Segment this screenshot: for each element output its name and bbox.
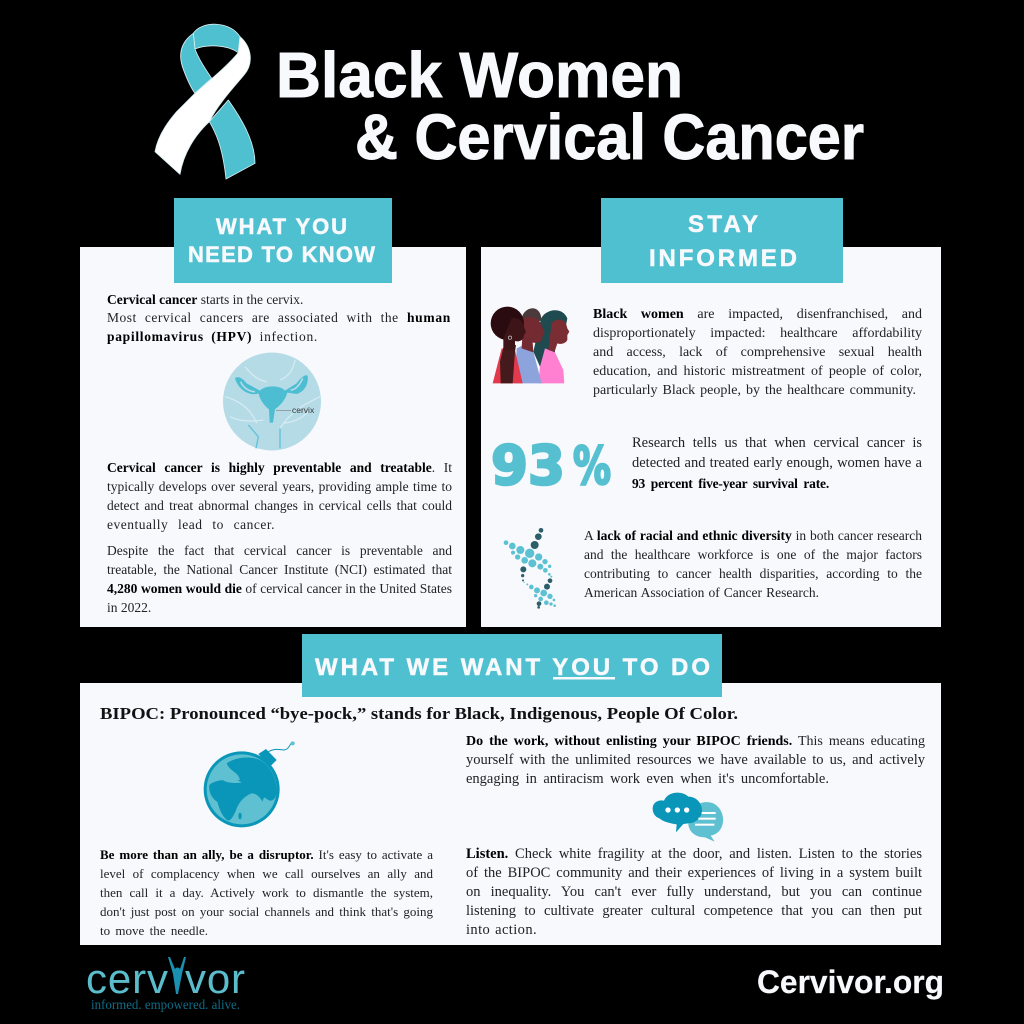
text block: survival rate: Research tells us that when cervical cancer is: [632, 435, 922, 451]
icon: three Black women in profile: [491, 307, 569, 383]
text block: be a disruptor: to move the needle.: [100, 923, 208, 938]
text block: do the work: yourself with the unlimited resources we have available to us, and actively: [466, 752, 925, 768]
text block: listen: [466, 845, 923, 940]
title: Black Women: [276, 39, 683, 111]
text block: Black women impacted: disproportionately impacted: healthcare affordability: [593, 326, 922, 341]
text block: be a disruptor: Be more than an ally, be a disruptor. It's easy to activate a: [100, 847, 433, 862]
text block: highly preventable: detect and treat abnormal changes in cervical cells that could: [107, 498, 452, 513]
heading tab: what we want you to do: [302, 634, 722, 697]
text block: cervical cancer intro: Cervical cancer starts in the cervix.: [107, 292, 303, 307]
text block: cervical cancer intro: Most cervical cancers are associated with the human: [107, 310, 451, 325]
text block: Black women impacted: [593, 305, 922, 400]
text block: NCI estimate: in 2022.: [107, 600, 151, 615]
logo: Cervivor: informed. empowered. alive.: [91, 998, 240, 1013]
statistic: 93 percent: %: [573, 437, 611, 497]
text block: highly preventable: typically develops over several years, providing ample time to: [107, 479, 452, 494]
icon: DNA dot helix: [504, 528, 556, 609]
text block: lack of diversity: American Association of Cancer Research.: [584, 585, 819, 600]
text block: do the work: engaging in antiracism work even when it's uncomfortable.: [466, 771, 829, 787]
text block: NCI estimate: [107, 541, 452, 617]
text block: highly preventable: Cervical cancer is highly preventable and treatable. It: [107, 460, 452, 475]
text block: BIPOC definition: BIPOC: Pronounced “bye-pock,” stands for Black, Indigenous, People Of Color.: [100, 704, 738, 723]
logo: Cervivor: [86, 955, 245, 1013]
heading tab: what you need to know: WHAT YOU: [216, 214, 347, 239]
text block: Black women impacted: Black women are impacted, disenfranchised, and: [593, 307, 922, 322]
text block: Black women impacted: education, and historic mistreatment of people of color,: [593, 364, 922, 379]
text block: lack of diversity: contributing to cancer health disparities, according to the: [584, 566, 922, 581]
icon: cervix illustration: [223, 352, 321, 450]
icon: cervix illustration: cervix: [292, 405, 315, 415]
text block: be a disruptor: level of complacency when we call ourselves an ally and: [100, 866, 433, 881]
text block: cervical cancer intro: papillomavirus (HPV) infection.: [107, 329, 318, 344]
heading tab: what you need to know: NEED TO KNOW: [188, 242, 375, 267]
text block: NCI estimate: treatable, the National Cancer Institute (NCI) estimated that: [107, 562, 452, 577]
text block: highly preventable: eventually lead to cancer.: [107, 517, 275, 532]
text block: lack of diversity: [584, 526, 922, 602]
heading tab: stay informed: STAY: [688, 211, 758, 238]
text block: listen: listening to cultivate greater cultural competence that you can then put: [466, 903, 922, 919]
text block: survival rate: 93 percent five-year survival rate.: [632, 476, 829, 491]
heading tab: stay informed: INFORMED: [649, 245, 797, 272]
panel: stay informed: [481, 247, 941, 627]
statistic: 93 percent: [491, 434, 611, 497]
text block: listen: Listen. Check white fragility at the door, and listen. Listen to the stories: [466, 846, 922, 862]
text block: be a disruptor: then call it a day. Actively work to dismantle the system,: [100, 885, 433, 900]
icon: chat bubbles: [653, 793, 723, 842]
text block: be a disruptor: don't just post on your social channels and think that's going: [100, 904, 433, 919]
text block: lack of diversity: A lack of racial and ethnic diversity in both cancer research: [584, 528, 922, 543]
heading tab: what we want you to do: WHAT WE WANT YOU TO DO: [315, 654, 710, 681]
text block: listen: of the BIPOC community and their experiences of living in a system built: [466, 865, 922, 881]
text block: highly preventable: [107, 458, 452, 534]
website link: Cervivor.org: [757, 964, 944, 1000]
text block: NCI estimate: 4,280 women would die of cervical cancer in the United States: [107, 581, 452, 596]
heading tab: what you need to know: [174, 198, 392, 283]
heading tab: stay informed: [601, 198, 843, 283]
logo: Cervivor: vor: [185, 955, 245, 1002]
text block: listen: into action.: [466, 922, 537, 938]
text block: listen: on inequality. You can't ever fully understand, but you can continue: [466, 884, 922, 900]
icon: awareness ribbon: [155, 24, 255, 179]
panel: what you need to know: [80, 247, 466, 627]
text block: cervical cancer intro: [107, 290, 452, 347]
text block: Black women impacted: particularly Black people, by the healthcare community.: [593, 383, 916, 398]
statistic: 93 percent: 93: [491, 434, 565, 497]
text block: be a disruptor: [100, 845, 434, 940]
panel: what we want you to do: [80, 683, 941, 945]
title: [276, 39, 864, 173]
text block: NCI estimate: Despite the fact that cervical cancer is preventable and: [107, 543, 452, 558]
text block: do the work: [466, 732, 926, 789]
title: & Cervical Cancer: [355, 101, 864, 173]
text block: survival rate: [632, 433, 922, 495]
text block: do the work: Do the work, without enlisting your BIPOC friends. This means educating: [466, 734, 925, 749]
text block: lack of diversity: and the healthcare workforce is one of the major factors: [584, 547, 922, 562]
logo: Cervivor: cerv: [86, 955, 168, 1002]
icon: globe bomb: [204, 741, 295, 827]
text block: survival rate: detected and treated early enough, women have a: [632, 455, 922, 471]
text block: Black women impacted: and access, lack of comprehensive sexual health: [593, 345, 922, 360]
